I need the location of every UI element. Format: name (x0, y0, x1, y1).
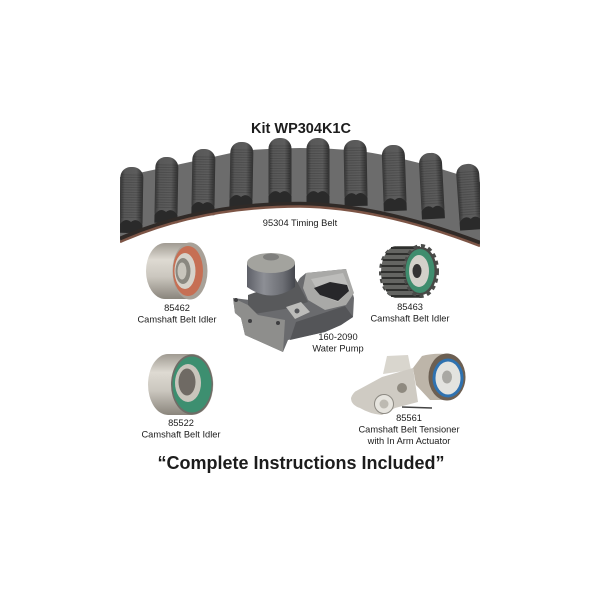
label: 85561: Camshaft Belt Tensioner (358, 424, 460, 434)
idler 85463 (381, 246, 437, 298)
label: water pump: 160-2090 (318, 332, 358, 342)
pump lower right dark section (290, 306, 353, 340)
pump flange opening (311, 273, 350, 302)
belt teeth (119, 138, 483, 233)
pump flange ring (303, 269, 354, 310)
tensioner upright (383, 355, 411, 374)
label: water pump: Water Pump (312, 344, 364, 354)
label: 85462: Camshaft Belt Idler (137, 314, 217, 324)
water pump (233, 253, 354, 352)
idler 85462 (146, 242, 208, 300)
belt brown edge (120, 204, 480, 243)
tensioner arm (351, 368, 418, 415)
tensioner small bolt (397, 383, 407, 393)
tensioner wire (402, 407, 432, 408)
timing belt (119, 138, 483, 246)
label: timing belt: 95304 Timing Belt (263, 218, 338, 228)
label: 85463: Camshaft Belt Idler (370, 314, 450, 324)
label: 85522: 85522 (168, 418, 194, 428)
tensioner pulley (413, 354, 465, 400)
label: 85561: with In Arm Actuator (367, 436, 450, 446)
footer note: “Complete Instructions Included” (157, 453, 445, 473)
tensioner bolt (374, 394, 394, 414)
belt backing (120, 148, 480, 245)
title: Kit WP304K1C (251, 121, 351, 137)
pump pulley hub (247, 263, 295, 296)
label: 85463: 85463 (397, 302, 423, 312)
pump mid body (248, 278, 308, 315)
tensioner 85561 (351, 354, 466, 415)
label: 85522: Camshaft Belt Idler (141, 430, 221, 440)
label: 85462: 85462 (164, 303, 190, 313)
label: 85561: 85561 (396, 413, 422, 423)
pump lug (286, 302, 310, 319)
pump lower casting (233, 298, 285, 352)
pump housing (233, 269, 354, 352)
idler 85522 (148, 354, 213, 415)
